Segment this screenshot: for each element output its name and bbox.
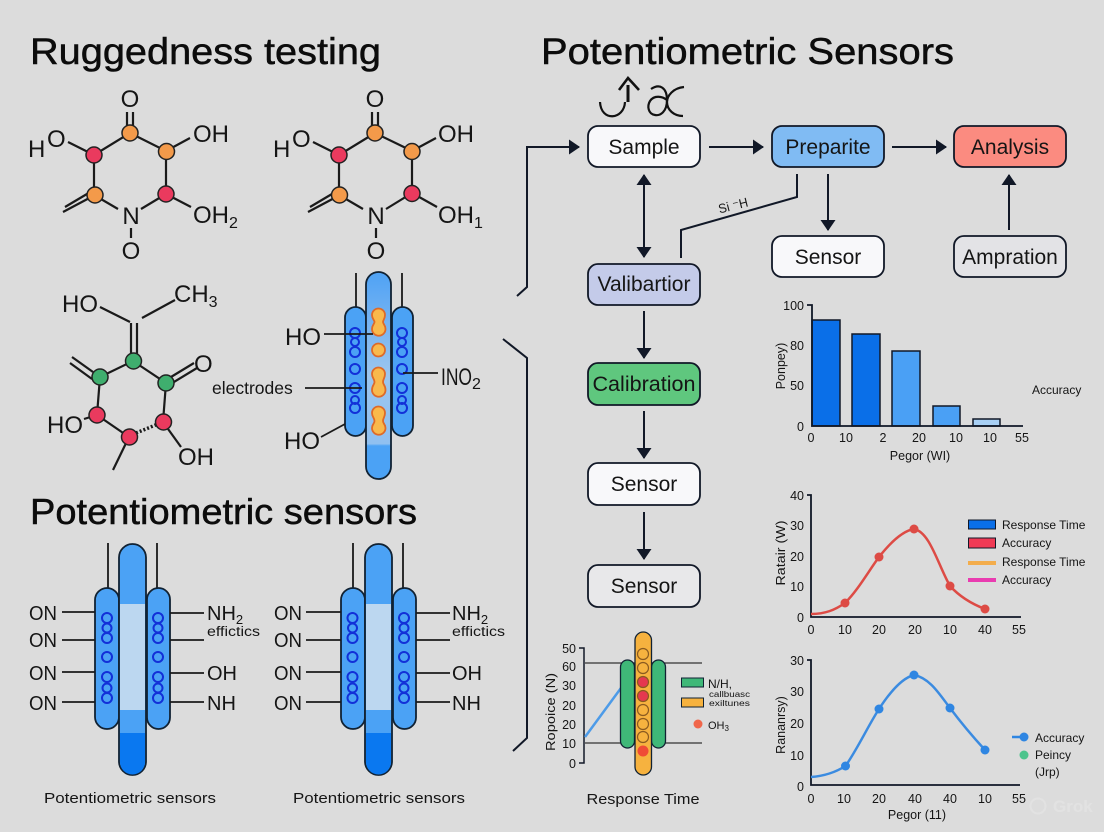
molecule 3: HO	[47, 412, 83, 439]
sensor diagram right: ON	[274, 663, 302, 685]
legend: red chart: Response Time	[1002, 555, 1086, 569]
molecule 3: CH	[174, 281, 209, 308]
sensor diagram right: NH	[452, 603, 481, 625]
small response chart: 50	[562, 642, 576, 656]
legend: small chart: OH	[708, 720, 724, 732]
sensor diagram right: 2	[481, 612, 488, 627]
box: Analysis: Analysis	[971, 136, 1049, 159]
sensor diagram right: ON	[274, 630, 302, 652]
sensor diagram left: ON	[29, 693, 57, 715]
line chart blue: 20	[790, 717, 804, 731]
bar chart: 100	[783, 299, 804, 313]
legend: small chart: N/H,	[708, 677, 732, 691]
molecule 2: O	[292, 126, 311, 153]
molecule 2: H	[273, 136, 290, 163]
molecule 2: O	[367, 238, 385, 265]
line chart red: 10	[790, 580, 804, 594]
sensor diagram left: ON	[29, 663, 57, 685]
box: Preparite: Preparite	[785, 136, 871, 159]
bar chart: Pegor (WI)	[890, 449, 950, 463]
line chart blue: 30	[790, 654, 804, 668]
sensor diagram right: OH	[452, 663, 482, 685]
title: Potentiometric Sensors: Potentiometric Sensors	[541, 31, 954, 72]
molecule 1: O	[47, 126, 66, 153]
line chart red: 0	[808, 623, 815, 637]
bar chart: 10	[949, 431, 963, 445]
caption: right sensor: Potentiometric sensors	[293, 790, 465, 807]
bar chart: 50	[790, 379, 804, 393]
line chart blue: 20	[872, 792, 886, 806]
legend: red chart: Accuracy	[1002, 536, 1051, 550]
molecule 2: OH	[438, 121, 474, 148]
box: Calibration	[588, 363, 700, 405]
sensor diagram left: NH	[207, 693, 236, 715]
arrow: calibration to sensor	[643, 411, 645, 458]
bar chart	[774, 299, 1081, 463]
legend: blue chart	[1012, 731, 1084, 779]
molecule 3: HO	[62, 291, 98, 318]
watermark: Grok: Grok	[1053, 797, 1093, 816]
molecule 2: O	[366, 86, 384, 113]
box: Ampration	[954, 236, 1066, 277]
legend: small chart: 3	[724, 724, 730, 733]
line chart red: 20	[872, 623, 886, 637]
bar chart: 2	[880, 431, 887, 445]
bar chart: 20	[912, 431, 926, 445]
box: Sample: Sample	[608, 136, 680, 159]
sensor diagram with electrodes: HO	[285, 324, 321, 351]
arrow: sensor to sensor	[643, 512, 645, 559]
molecule 1: H	[28, 136, 45, 163]
molecule 1: O	[121, 86, 139, 113]
box: Sensor 2: Sensor	[611, 473, 677, 496]
line chart red: 20	[908, 623, 922, 637]
molecule 2: OH	[438, 202, 474, 229]
box: Sample	[588, 126, 700, 167]
connector: preparite to validation	[681, 174, 797, 258]
legend: blue chart: (Jrp)	[1035, 765, 1060, 779]
box: Valibartior: Valibartior	[598, 273, 690, 296]
legend: small chart: callbuasc	[709, 690, 750, 699]
sensor diagram left: ON	[29, 630, 57, 652]
small response chart: 60	[562, 660, 576, 674]
bracket left of flow	[503, 339, 527, 751]
arrow: sample to validation double	[643, 175, 645, 257]
line chart red: 40	[790, 489, 804, 503]
bar chart: 10	[983, 431, 997, 445]
bar chart: 55	[1015, 431, 1029, 445]
line chart blue: 0	[808, 792, 815, 806]
watermark: Grok	[1030, 797, 1093, 816]
molecule 1	[28, 86, 238, 265]
box: Sensor 3	[588, 565, 700, 607]
small response chart: 20	[562, 718, 576, 732]
box: Analysis	[954, 126, 1066, 167]
sensor diagram with electrodes: 2	[472, 376, 481, 393]
small response chart: Response Time	[586, 791, 700, 808]
sensor diagram with electrodes	[212, 272, 481, 479]
sensor diagram left	[29, 543, 260, 775]
connector label: Si ⁻H	[717, 195, 749, 216]
small response chart: 10	[562, 737, 576, 751]
line chart blue: 40	[943, 792, 957, 806]
box: Sensor 3: Sensor	[611, 575, 677, 598]
line chart blue: 10	[978, 792, 992, 806]
box: Calibration: Calibration	[592, 373, 696, 396]
molecule 2	[273, 86, 483, 265]
molecule 3	[47, 281, 218, 471]
molecule 2: N	[367, 203, 385, 230]
bar chart: 10	[839, 431, 853, 445]
legend: red chart	[968, 518, 1086, 587]
line chart red: 20	[790, 550, 804, 564]
line chart blue: 0	[797, 780, 804, 794]
box: Sensor 2	[588, 463, 700, 505]
sensor diagram with electrodes: electrodes	[212, 378, 293, 398]
small response chart: 30	[562, 679, 576, 693]
bar chart: 0	[808, 431, 815, 445]
line chart red: 10	[838, 623, 852, 637]
line chart blue: 10	[790, 749, 804, 763]
line chart blue: 30	[790, 685, 804, 699]
bar chart: 80	[790, 339, 804, 353]
line chart blue	[774, 654, 1084, 822]
box: Ampration: Ampration	[962, 246, 1058, 269]
sensor diagram with electrodes: HO	[284, 428, 320, 455]
line chart red: 30	[790, 519, 804, 533]
sensor diagram with electrodes: INO	[441, 364, 472, 391]
small response chart: Ropoice (N)	[544, 673, 558, 751]
legend: red chart: Response Time	[1002, 518, 1086, 532]
legend: red chart: Accuracy	[1002, 573, 1051, 587]
title: Ruggedness testing: Ruggedness testing	[30, 31, 381, 72]
sensor diagram right	[274, 543, 505, 775]
arrow: amplification to analysis	[1008, 175, 1010, 230]
box: Sensor: Sensor	[795, 246, 861, 269]
molecule 1: O	[122, 238, 140, 265]
molecule 1: OH	[193, 121, 229, 148]
bar chart: 0	[797, 420, 804, 434]
legend: blue chart: Peincy	[1035, 748, 1071, 762]
box: Valibartior	[588, 264, 700, 305]
line chart red	[774, 489, 1086, 637]
bar chart: Accuracy	[1032, 383, 1081, 397]
line chart blue: Pegor (11)	[888, 808, 946, 822]
legend: blue chart: Accuracy	[1035, 731, 1084, 745]
heading: Potentiometric sensors: Potentiometric sensors	[30, 491, 417, 532]
molecule 3: OH	[178, 444, 214, 471]
line chart blue: 40	[908, 792, 922, 806]
line chart blue: Rananrsy)	[774, 696, 788, 754]
molecule 2: 1	[474, 215, 483, 232]
line chart blue: 55	[1012, 792, 1026, 806]
small response chart: 0	[569, 757, 576, 771]
sensor diagram right: ON	[274, 693, 302, 715]
small response chart	[544, 632, 750, 808]
icon: symbols above sample	[600, 78, 684, 116]
arrow: sample to preparite	[709, 146, 763, 148]
box: Preparite	[772, 126, 884, 167]
legend: small chart	[682, 677, 750, 733]
sensor diagram right: NH	[452, 693, 481, 715]
arrow: validation to calibration	[643, 311, 645, 358]
line chart red: Ratair (W)	[774, 520, 788, 586]
line chart blue: 10	[837, 792, 851, 806]
bar chart: Ponpey)	[774, 343, 788, 389]
line chart red: 10	[943, 623, 957, 637]
arrow: preparite to analysis	[892, 146, 946, 148]
bracket arrow into sample	[517, 147, 579, 296]
sensor diagram left: OH	[207, 663, 237, 685]
molecule 3: O	[194, 351, 213, 378]
line chart red: 40	[978, 623, 992, 637]
caption: left sensor: Potentiometric sensors	[44, 790, 216, 807]
molecule 1: OH	[193, 202, 229, 229]
small response chart: 20	[562, 699, 576, 713]
line chart red: 55	[1012, 623, 1026, 637]
arrow: preparite to sensor	[827, 174, 829, 230]
sensor diagram right: ON	[274, 603, 302, 625]
molecule 1: N	[122, 203, 140, 230]
molecule 1: 2	[229, 215, 238, 232]
molecule 3: 3	[209, 294, 218, 311]
line chart red: 0	[797, 611, 804, 625]
sensor diagram left: ON	[29, 603, 57, 625]
box: Sensor	[772, 236, 884, 277]
legend: small chart: exiltunes	[709, 699, 750, 708]
sensor diagram left: 2	[236, 612, 243, 627]
sensor diagram right: effictics	[452, 624, 505, 639]
sensor diagram left: effictics	[207, 624, 260, 639]
sensor diagram left: NH	[207, 603, 236, 625]
